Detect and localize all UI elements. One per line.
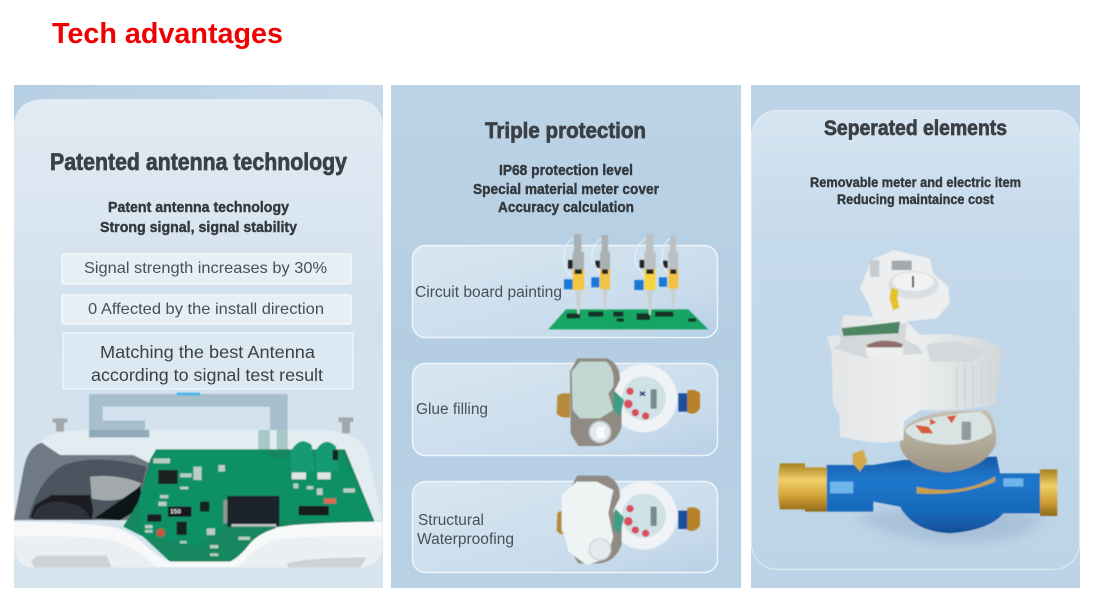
- panel: patented antenna technology: [14, 85, 383, 588]
- card: circuit board painting: Circuit board painting: [415, 284, 562, 301]
- feature box: signal strength: Signal strength increases by 30%: [84, 260, 327, 277]
- subheading: IP68 protection level: [499, 163, 633, 179]
- illustration: opened meter with antenna and circuit board: 150: [170, 509, 181, 516]
- meter register: [900, 410, 996, 473]
- subheading: Strong signal, signal stability: [100, 219, 298, 236]
- feature box: install direction: [62, 295, 351, 324]
- heading: Triple protection: [485, 118, 646, 143]
- feature box: signal strength: [62, 254, 351, 284]
- label: Structural: [418, 512, 484, 529]
- antenna: [89, 394, 288, 430]
- illustration: dispensing heads over green board: [548, 234, 708, 329]
- illustration: opened meter with antenna and circuit board: [14, 393, 383, 567]
- green coil components: [291, 441, 338, 472]
- circuit board: [123, 449, 374, 562]
- main chip: [227, 496, 279, 527]
- pipe body: [778, 450, 1057, 533]
- card: circuit board painting: [412, 234, 718, 338]
- small chips and parts: [158, 470, 178, 484]
- label: [417, 512, 514, 548]
- subheading: [810, 175, 1021, 207]
- subheading: [473, 163, 659, 216]
- card: structural waterproofing: [412, 476, 718, 572]
- subheading: Special material meter cover: [473, 182, 659, 198]
- panel: seperated elements: [751, 85, 1080, 588]
- inner glass card: [752, 110, 1080, 570]
- feature box: matching antenna: according to signal test result: [91, 365, 323, 385]
- electronics housing: [827, 315, 1005, 443]
- illustration: meter with glue-filled electronics: [557, 358, 700, 446]
- housing rear: [14, 430, 383, 520]
- label: Waterproofing: [417, 531, 514, 548]
- subheading: Patent antenna technology: [108, 199, 290, 216]
- title: Tech advantages: [52, 18, 283, 50]
- subheading: Reducing maintaince cost: [837, 192, 994, 207]
- subheading: Accuracy calculation: [498, 200, 634, 216]
- illustration: exploded water meter: [778, 250, 1057, 543]
- inner glass card: [14, 99, 383, 588]
- card: glue filling: [412, 358, 718, 456]
- heading: Seperated elements: [824, 117, 1007, 140]
- subheading: Removable meter and electric item: [810, 175, 1021, 190]
- screws: [53, 417, 353, 433]
- subheading: [100, 199, 298, 236]
- panel: triple protection: [391, 85, 741, 588]
- illustration: meter with waterproof cover: [557, 476, 700, 565]
- feature box: matching antenna: [63, 333, 353, 389]
- feature box: install direction: 0 Affected by the install direction: [88, 301, 324, 318]
- battery cavity: [14, 443, 150, 520]
- heading: Patented antenna technology: [50, 149, 348, 176]
- front housing: [14, 522, 383, 567]
- card: glue filling: Glue filling: [416, 401, 488, 418]
- feature box: matching antenna: Matching the best Antenna: [100, 342, 315, 362]
- top cover: [860, 250, 950, 322]
